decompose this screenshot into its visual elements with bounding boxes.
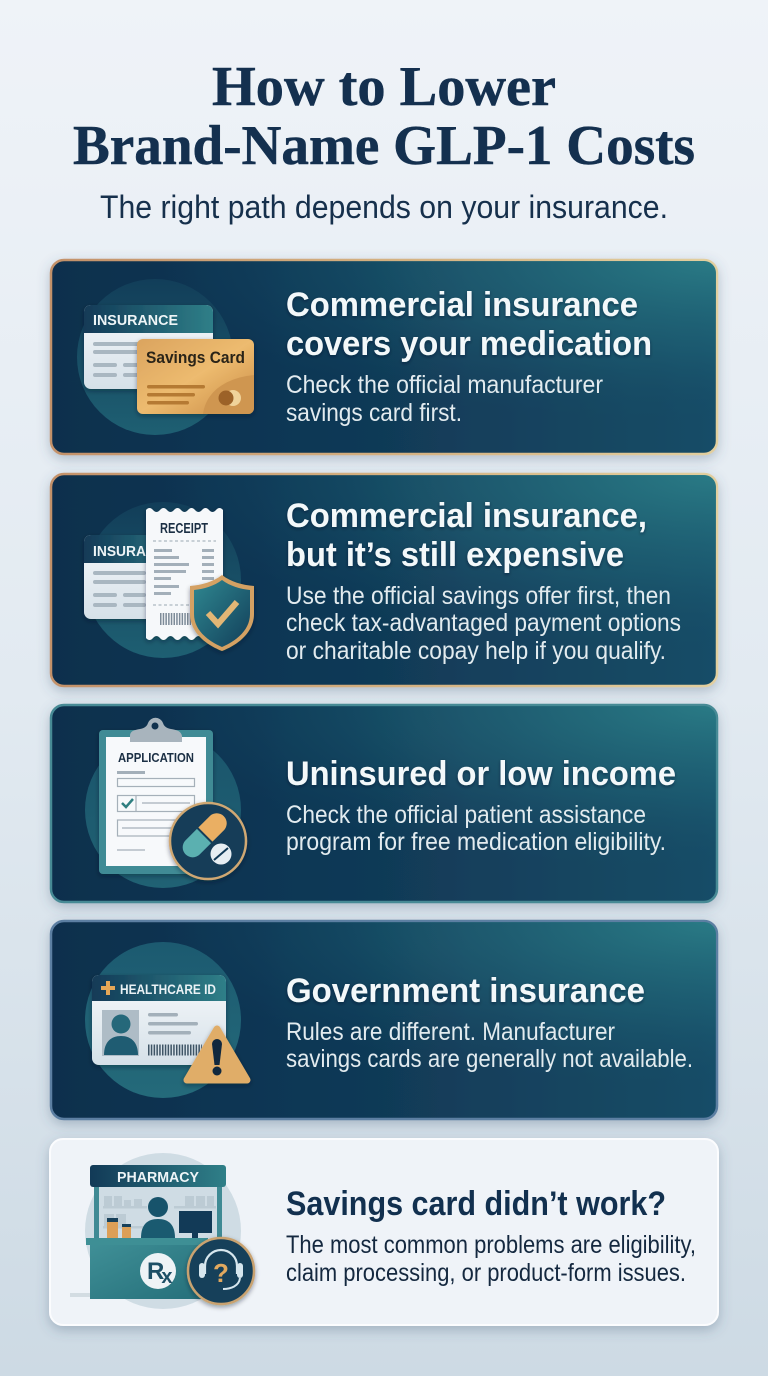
text: card 3: program for free medication eligibility. bbox=[286, 828, 666, 856]
icon: application clipboard and pills bbox=[85, 718, 246, 888]
icon: insurance card, receipt and shield bbox=[84, 502, 254, 658]
text: card 3: Uninsured or low income bbox=[286, 755, 676, 793]
panel: commercial insurance still expensive bbox=[51, 474, 717, 686]
text: card 4: savings cards are generally not available. bbox=[286, 1045, 693, 1073]
text: card 1 bbox=[286, 286, 652, 427]
panel: government insurance bbox=[51, 921, 717, 1119]
text: card 4: Government insurance bbox=[286, 972, 645, 1010]
icon: insurance and savings cards: Savings Card bbox=[146, 349, 245, 367]
title: Brand-Name GLP-1 Costs bbox=[73, 115, 695, 177]
icon: application clipboard and pills: APPLICATION bbox=[118, 751, 194, 765]
text: card 2: Commercial insurance, bbox=[286, 497, 647, 535]
subtitle: The right path depends on your insurance. bbox=[100, 189, 668, 225]
icon: insurance card, receipt and shield: RECEIPT bbox=[160, 521, 208, 537]
icon: pharmacy counter and help badge: R bbox=[147, 1258, 164, 1285]
panel: savings card didn't work bbox=[50, 1139, 718, 1325]
text: card 2: but it’s still expensive bbox=[286, 536, 624, 574]
text: card 1: Commercial insurance bbox=[286, 286, 638, 324]
panel: commercial insurance covers medication bbox=[51, 260, 717, 454]
icon: healthcare ID and warning bbox=[85, 942, 247, 1098]
icon: insurance and savings cards: INSURANCE bbox=[93, 313, 178, 329]
text: card 2 bbox=[286, 497, 681, 665]
text: card 2: Use the official savings offer first, then bbox=[286, 582, 671, 610]
text: card 3 bbox=[286, 755, 676, 856]
panel: uninsured or low income bbox=[51, 705, 717, 902]
text: card 5: The most common problems are eligibility, bbox=[286, 1231, 696, 1259]
icon: pharmacy counter and help badge bbox=[70, 1153, 254, 1309]
text: card 5 bbox=[286, 1185, 696, 1287]
text: card 1: savings card first. bbox=[286, 399, 462, 427]
text: card 3: Check the official patient assistance bbox=[286, 801, 646, 829]
text: card 2: or charitable copay help if you qualify. bbox=[286, 637, 666, 665]
text: card 2: check tax-advantaged payment options bbox=[286, 609, 681, 637]
icon: pharmacy counter and help badge: ? bbox=[213, 1258, 229, 1288]
icon: insurance card, receipt and shield: INSURA bbox=[93, 544, 146, 560]
text: card 5: claim processing, or product-form issues. bbox=[286, 1259, 686, 1287]
text: card 1: covers your medication bbox=[286, 325, 652, 363]
text: card 4 bbox=[286, 972, 693, 1073]
icon: insurance and savings cards bbox=[77, 279, 254, 435]
icon: pharmacy counter and help badge: x bbox=[161, 1266, 172, 1288]
title: How to Lower bbox=[212, 56, 556, 118]
text: card 4: Rules are different. Manufacturer bbox=[286, 1018, 615, 1046]
text: card 5: Savings card didn’t work? bbox=[286, 1185, 666, 1223]
icon: healthcare ID and warning: HEALTHCARE ID bbox=[120, 982, 216, 997]
title bbox=[73, 56, 695, 177]
text: card 1: Check the official manufacturer bbox=[286, 371, 603, 399]
icon: pharmacy counter and help badge: PHARMACY bbox=[117, 1170, 199, 1186]
